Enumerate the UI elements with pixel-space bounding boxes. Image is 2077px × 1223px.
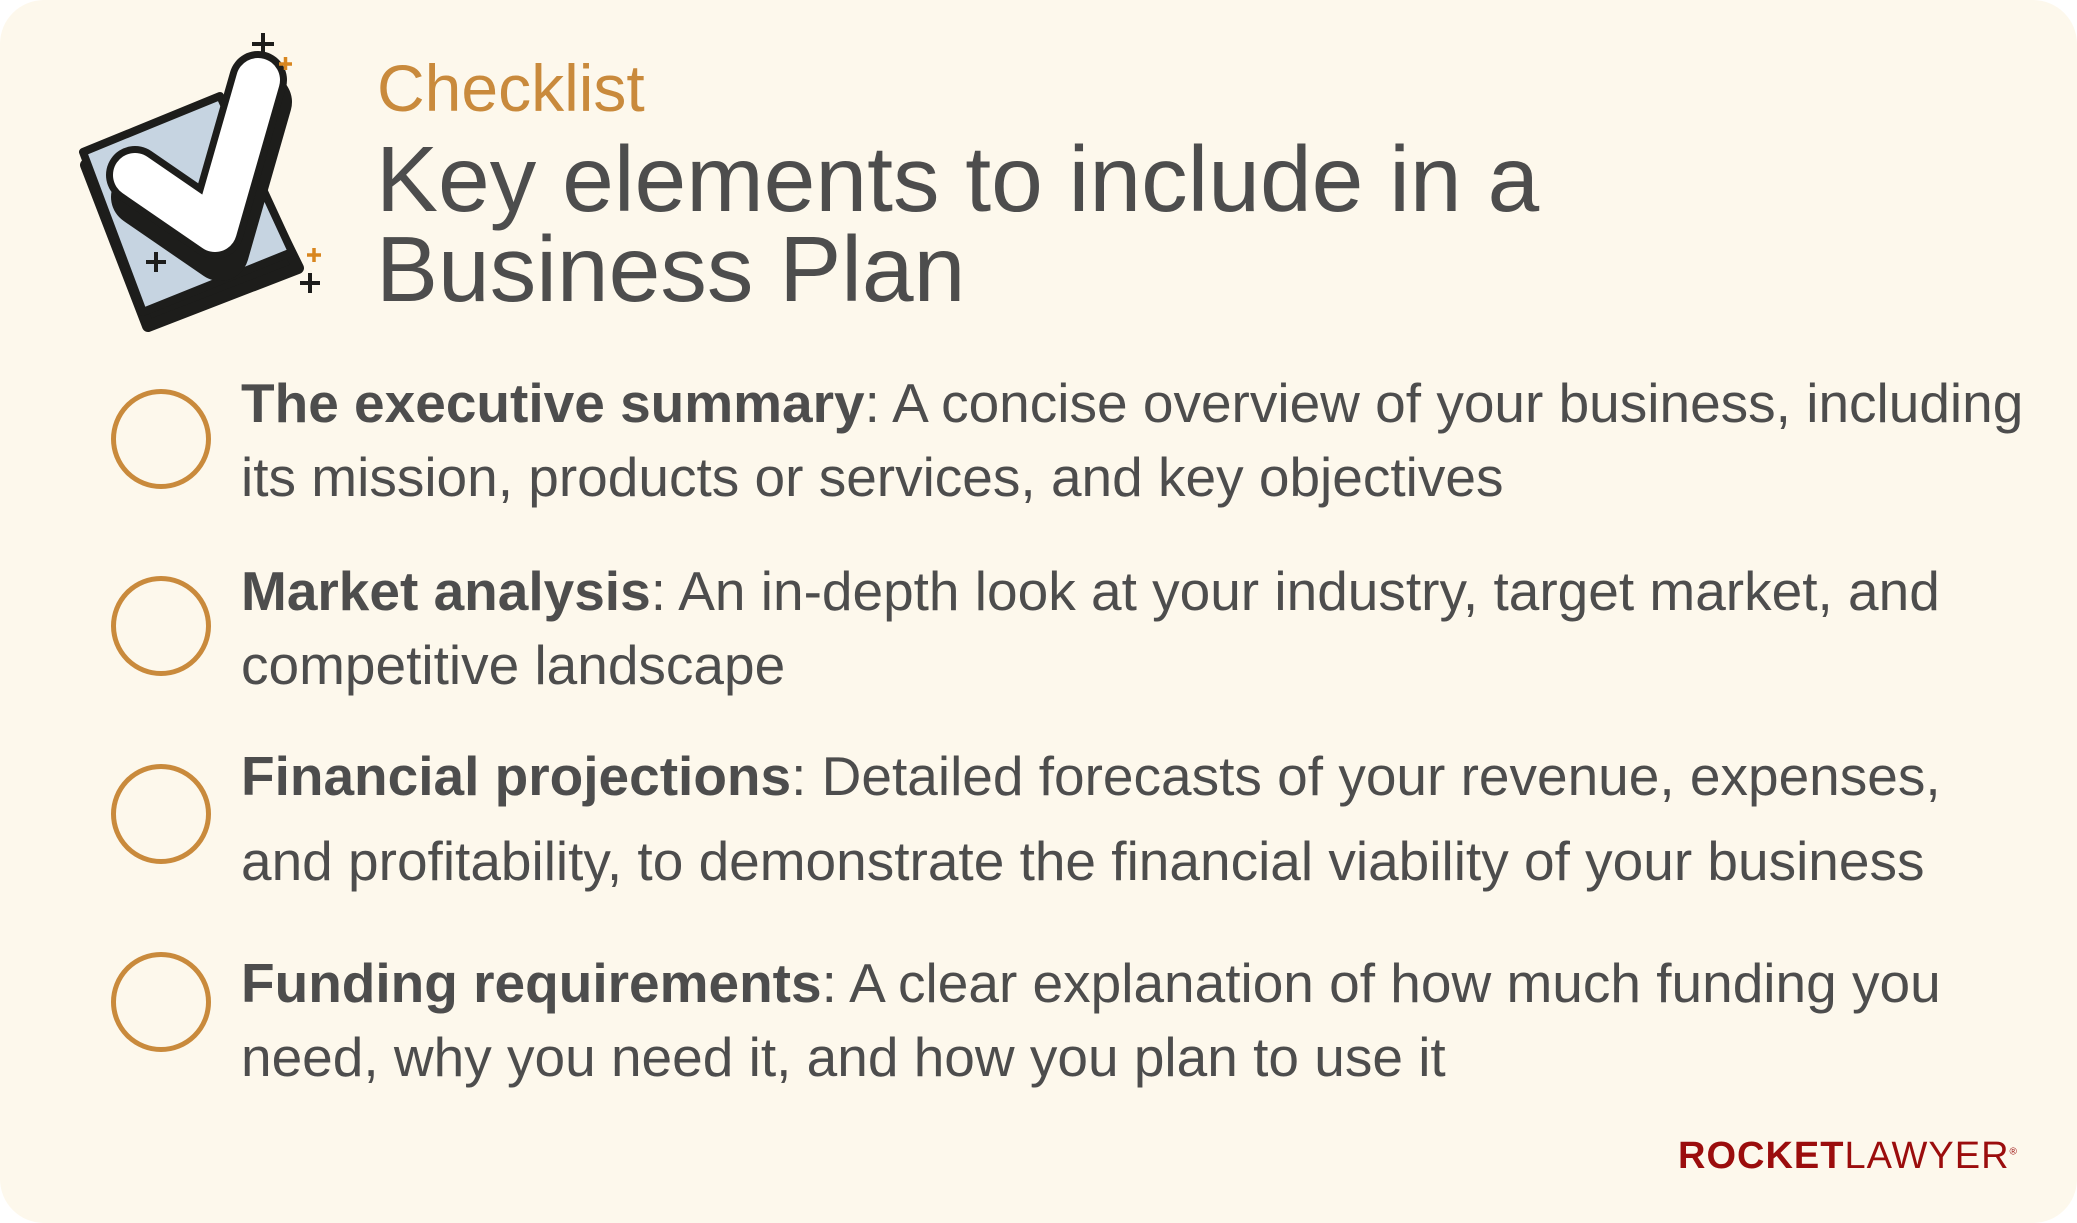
text: need, why you need it, and how you plan to use it bbox=[241, 1026, 1446, 1088]
text: competitive landscape bbox=[241, 634, 785, 696]
text: and profitability, to demonstrate the financial viability of your business bbox=[241, 830, 1924, 892]
title: Key elements to include in a bbox=[376, 127, 1539, 231]
logo: ROCKETLAWYER® bbox=[1678, 1135, 2018, 1177]
item 3 bbox=[111, 764, 211, 864]
item 4 bbox=[111, 952, 211, 1052]
icon: checkbox bbox=[79, 33, 321, 332]
item 2 bbox=[111, 576, 211, 676]
title: Business Plan bbox=[376, 217, 965, 321]
text: Market analysis: An in-depth look at your industry, target market, and bbox=[241, 560, 1940, 622]
item 1 bbox=[111, 389, 211, 489]
text: its mission, products or services, and key objectives bbox=[241, 446, 1503, 508]
label: Checklist: Checklist bbox=[377, 51, 645, 125]
text: Funding requirements: A clear explanation of how much funding you bbox=[241, 952, 1941, 1014]
text: Financial projections: Detailed forecasts of your revenue, expenses, bbox=[241, 745, 1941, 807]
text: The executive summary: A concise overview of your business, including bbox=[241, 372, 2023, 434]
title bbox=[376, 127, 1540, 321]
